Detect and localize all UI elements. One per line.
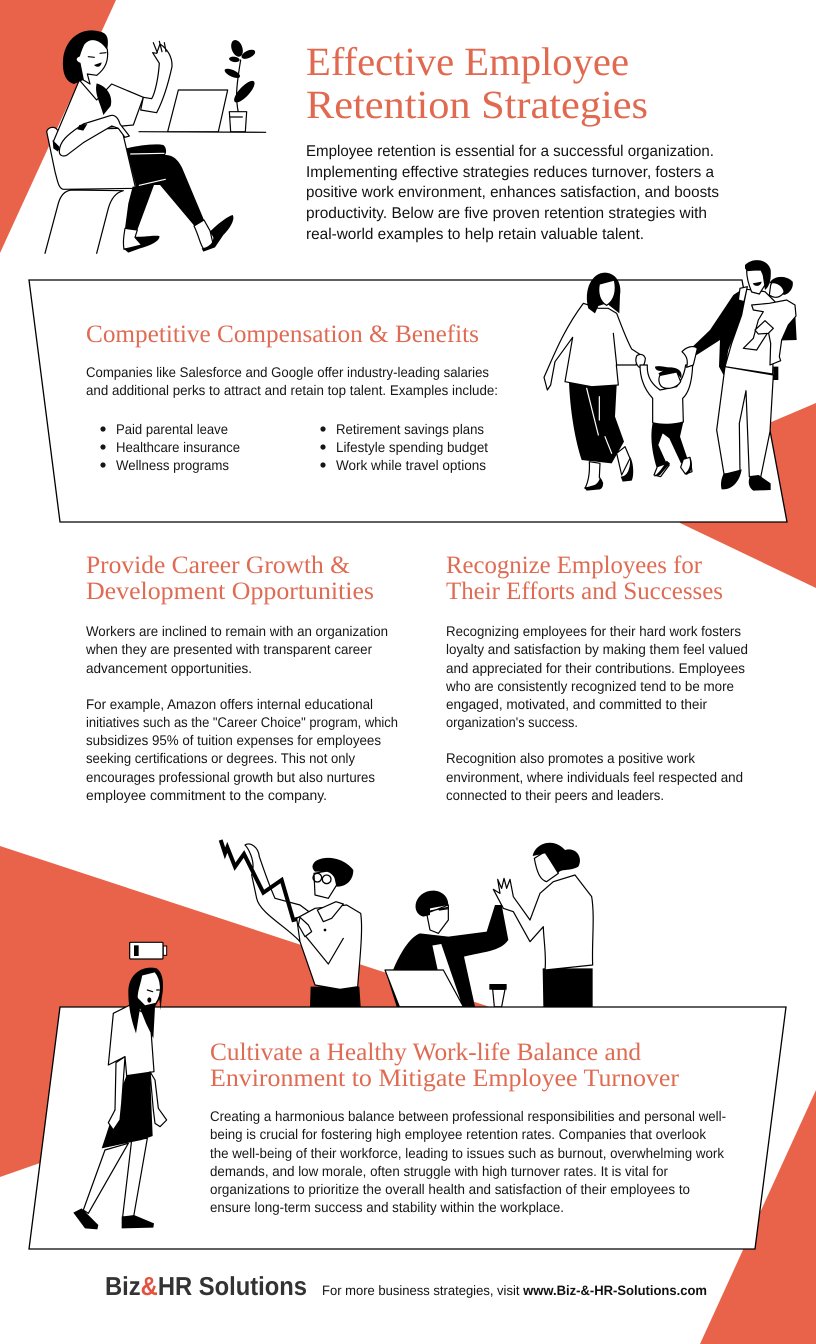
bullet list left <box>100 421 240 473</box>
seated man high-five <box>385 891 508 1007</box>
coffee cup <box>489 984 507 1007</box>
paragraph <box>210 1108 726 1215</box>
paragraphs: For example, Amazon offers internal educational <box>86 696 373 712</box>
shoes <box>73 1208 154 1229</box>
background shape: right orange wedge <box>640 403 816 588</box>
paragraphs: connected to their peers and leaders. <box>446 787 664 803</box>
paragraphs: loyalty and satisfaction by making them feel valued <box>446 641 748 657</box>
legs and shoes <box>123 144 233 253</box>
paragraphs: Recognition also promotes a positive work <box>446 750 696 766</box>
paragraphs: Recognizing employees for their hard work fosters <box>446 623 741 639</box>
standing woman high-five <box>493 843 593 1007</box>
chair <box>45 127 136 253</box>
background shape: top-left orange triangle <box>0 0 116 253</box>
heading: Their Efforts and Successes <box>446 578 723 605</box>
title: Retention Strategies <box>306 82 648 127</box>
panel: competitive compensation <box>29 280 787 522</box>
paragraphs: environment, where individuals feel respected and <box>446 769 743 785</box>
intro paragraph: productivity. Below are five proven retention strategies with <box>306 205 707 222</box>
brand logo text: Biz&HR Solutions <box>105 1271 307 1301</box>
bullet list right: Retirement savings plans <box>336 421 484 437</box>
heading: Development Opportunities <box>86 578 374 605</box>
intro paragraph: positive work environment, enhances satisfaction, and boosts <box>306 184 719 201</box>
head and hair <box>63 30 108 84</box>
heading: Provide Career Growth & <box>86 552 350 579</box>
section: recognize employees <box>445 552 748 803</box>
background shape: bottom-right orange triangle <box>700 1090 816 1344</box>
illustration: family holding hands <box>544 260 797 491</box>
desk, laptop and plant <box>139 38 266 132</box>
arm reaching up <box>245 844 313 942</box>
father with baby <box>682 260 797 491</box>
paragraph: ensure long-term success and stability within the workplace. <box>210 1199 564 1215</box>
section: competitive compensation text <box>86 321 498 473</box>
arrow <box>221 840 300 920</box>
paragraph: and additional perks to attract and retain top talent. Examples include: <box>86 382 498 398</box>
top and arms <box>108 1005 167 1130</box>
section: career growth <box>85 552 398 803</box>
bullet list right <box>320 421 488 473</box>
paragraph: the well-being of their workforce, leading to issues such as burnout, overwhelming work <box>210 1145 725 1161</box>
paragraphs: who are consistently recognized tend to be more <box>445 678 734 694</box>
paragraphs <box>85 623 398 803</box>
man body <box>297 858 362 1007</box>
child <box>640 365 693 477</box>
illustration: tired woman with low battery <box>73 942 167 1229</box>
bullet list left: Healthcare insurance <box>116 439 240 455</box>
paragraphs: encourages professional growth but also nurtures <box>86 769 375 785</box>
heading: Cultivate a Healthy Work-life Balance and <box>210 1039 642 1066</box>
paragraphs: subsidizes 95% of tuition expenses for employees <box>86 732 381 748</box>
paragraphs: initiatives such as the "Career Choice" program, which <box>86 714 398 730</box>
paragraph: Companies like Salesforce and Google offer industry-leading salaries <box>86 364 489 380</box>
paragraph: Creating a harmonious balance between professional responsibilities and personal well- <box>210 1108 726 1124</box>
header text block <box>306 39 719 243</box>
bullet list left: Paid parental leave <box>116 421 228 437</box>
title: Effective Employee <box>306 39 629 84</box>
bullet list left: Wellness programs <box>116 457 229 473</box>
intro paragraph <box>306 143 719 243</box>
legs <box>83 1138 147 1218</box>
heading <box>210 1039 680 1092</box>
torso, ponytail and arms <box>53 41 172 156</box>
battery icon <box>130 942 167 959</box>
footer link line: For more business strategies, visit www.Biz-&-HR-Solutions.com <box>322 1283 707 1298</box>
paragraphs: advancement opportunities. <box>86 660 252 676</box>
paragraphs: seeking certifications or degrees. This not only <box>86 750 355 766</box>
bullet list right: Lifestyle spending budget <box>336 439 488 455</box>
paragraphs: employee commitment to the company. <box>86 787 327 803</box>
heading <box>446 552 723 605</box>
paragraphs: organization's success. <box>446 714 578 730</box>
intro paragraph: real-world examples to help retain valuable talent. <box>306 226 644 243</box>
heading: Environment to Mitigate Employee Turnover <box>210 1065 680 1092</box>
paragraph: demands, and low morale, often struggle with high turnover rates. It is vital for <box>210 1163 668 1179</box>
footer <box>105 1271 707 1301</box>
illustration: woman seated at desk with laptop <box>45 30 266 253</box>
intro paragraph: Employee retention is essential for a successful organization. <box>306 143 714 160</box>
paragraph <box>86 364 498 398</box>
skirt <box>102 1072 153 1148</box>
paragraph: being is crucial for fostering high employee retention rates. Companies that overlook <box>210 1126 707 1142</box>
panel: work-life balance <box>29 1007 786 1249</box>
paragraphs: Workers are inclined to remain with an organization <box>86 623 388 639</box>
heading: Competitive Compensation & Benefits <box>86 321 479 348</box>
heading <box>86 552 374 605</box>
paragraphs: and appreciated for their contributions. Employees <box>446 660 745 676</box>
paragraphs: when they are presented with transparent career <box>85 641 372 657</box>
paragraphs <box>445 623 748 803</box>
illustration: man pointing at chart arrow <box>221 840 593 1007</box>
title <box>306 39 648 127</box>
background shape: left orange wedge <box>0 846 490 1177</box>
bullet list right: Work while travel options <box>336 457 486 473</box>
paragraph: organizations to prioritize the overall health and satisfaction of their employees to <box>210 1181 690 1197</box>
hair and face <box>128 968 163 1038</box>
paragraphs: engaged, motivated, and committed to their <box>446 696 707 712</box>
section: work-life balance text <box>210 1039 726 1215</box>
intro paragraph: Implementing effective strategies reduces turnover, fosters a <box>306 164 714 181</box>
mother <box>544 273 645 491</box>
heading: Recognize Employees for <box>446 552 703 579</box>
